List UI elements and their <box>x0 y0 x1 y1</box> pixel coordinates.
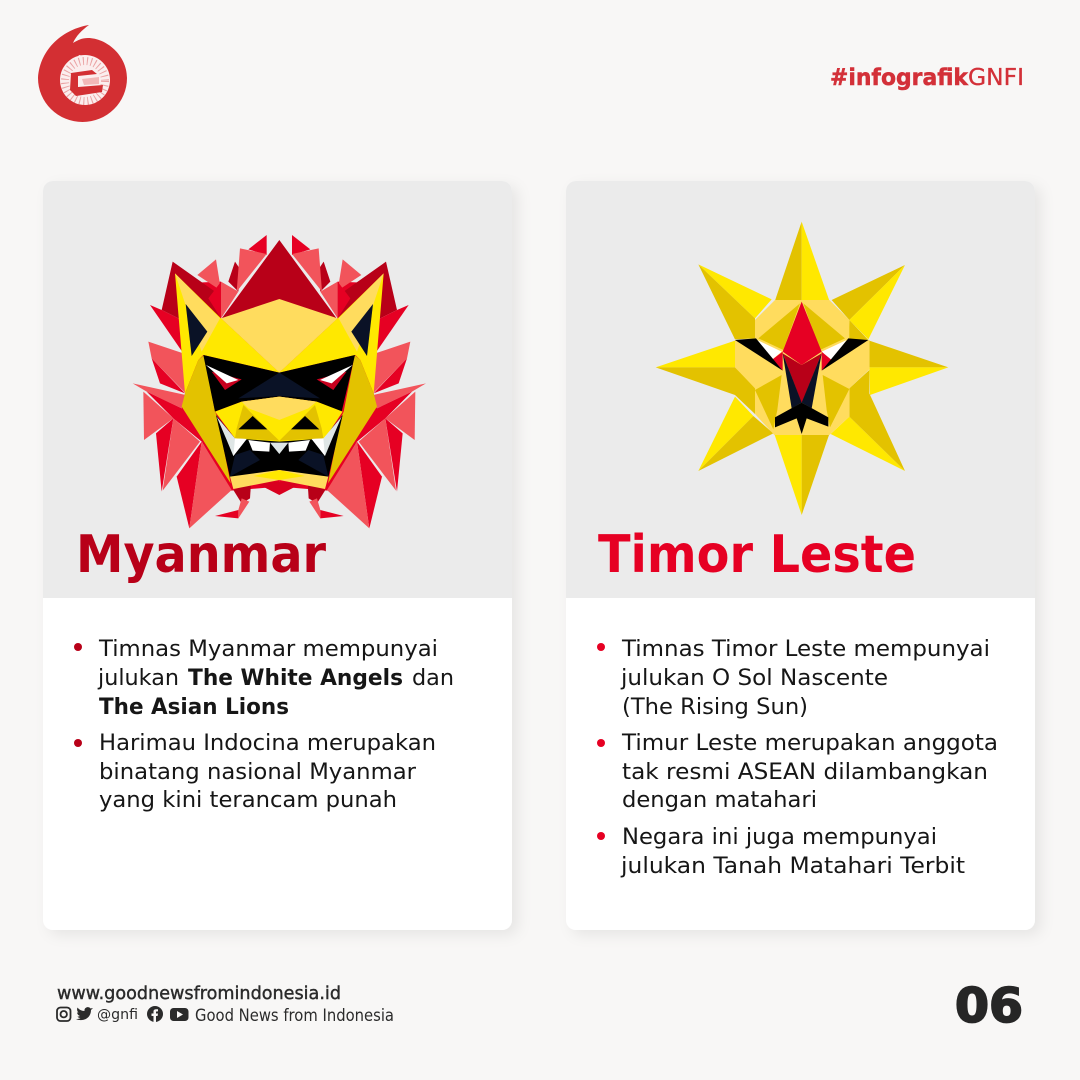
icon: twitter <box>76 1007 93 1020</box>
icon: instagram <box>57 1008 70 1021</box>
social name: Good News from Indonesia <box>195 1006 394 1025</box>
lion face <box>735 300 869 435</box>
text block: Timor Leste facts: tak resmi ASEAN dilambangkan <box>622 760 988 785</box>
heading: Myanmar: Myanmar <box>76 525 326 585</box>
icon: facebook <box>147 1006 163 1022</box>
text block: Timor Leste facts: julukan Tanah Matahari Terbit <box>620 854 965 879</box>
text block: Timor Leste facts: dengan matahari <box>622 788 817 813</box>
text block: Myanmar facts: yang kini terancam punah <box>99 788 397 813</box>
text block: Timor Leste facts: julukan O Sol Nascente <box>620 666 888 691</box>
text block: Timor Leste facts <box>597 637 998 879</box>
text block: Myanmar facts: The Asian Lions <box>99 695 289 720</box>
text block: Myanmar facts: The White Angels <box>188 666 403 691</box>
text block: Myanmar facts: Harimau Indocina merupakan <box>99 731 436 756</box>
text block: Myanmar facts: julukan <box>97 666 179 691</box>
lion face <box>175 273 384 489</box>
text block: Timor Leste facts: Negara ini juga mempunyai <box>622 825 937 850</box>
text block: Timor Leste facts: Timnas Timor Leste mempunyai <box>621 637 990 662</box>
text block: Timor Leste facts: (The Rising Sun) <box>622 695 808 720</box>
lion mane <box>133 235 426 528</box>
hashtag label: #infografik <box>830 65 969 91</box>
icon: youtube <box>170 1008 188 1021</box>
logo: GNFI red six with garuda emblem <box>38 25 127 122</box>
panel: Myanmar <box>43 181 512 930</box>
social handle: @gnfi <box>97 1007 138 1023</box>
text block: Myanmar facts: Timnas Myanmar mempunyai <box>98 637 438 662</box>
website url: www.goodnewsfromindonesia.id <box>57 984 341 1004</box>
text block: Myanmar facts <box>74 637 454 813</box>
text block: Myanmar facts: binatang nasional Myanmar <box>99 760 417 785</box>
page number: 06 <box>955 979 1023 1034</box>
text block: Timor Leste facts: Timur Leste merupakan anggota <box>621 731 998 756</box>
sun rays <box>656 222 948 515</box>
footer: website and social <box>57 984 394 1025</box>
text block: Myanmar facts: dan <box>412 666 454 691</box>
panel: Timor Leste <box>566 181 1035 930</box>
illustration: Myanmar lion <box>133 235 426 528</box>
hashtag label: GNFI <box>968 65 1024 91</box>
heading: Timor Leste: Timor Leste <box>598 525 916 585</box>
illustration: Timor Leste sun lion <box>656 222 948 515</box>
